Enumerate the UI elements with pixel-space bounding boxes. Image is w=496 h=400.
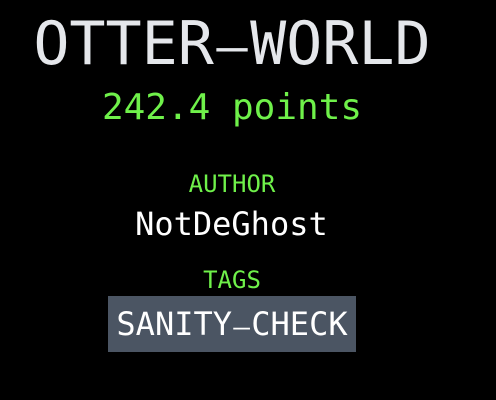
tags label: TAGS — [203, 266, 261, 294]
author label: AUTHOR — [189, 170, 275, 198]
title: OTTER WORLD — [33, 9, 431, 79]
tag: sanity-check — [108, 296, 356, 352]
tag: sanity-check: SANITY CHECK — [116, 305, 348, 343]
title: - — [195, 23, 269, 72]
author name: NotDeGhost — [135, 205, 328, 243]
points score: 242.4 points — [102, 87, 362, 128]
tag: sanity-check: - — [222, 313, 261, 340]
